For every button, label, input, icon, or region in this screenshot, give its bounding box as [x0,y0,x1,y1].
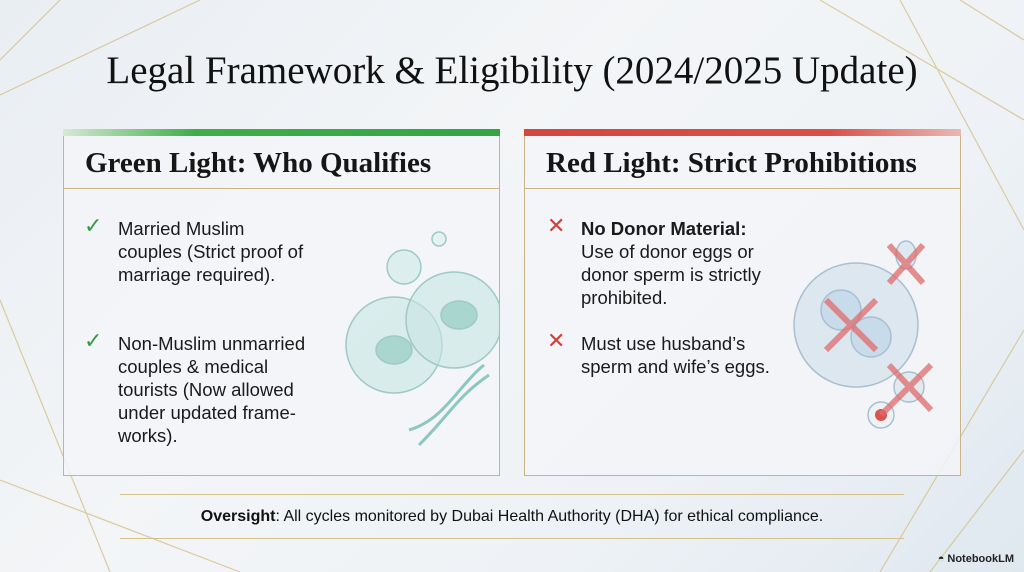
illustration: cells and DNA [345,231,499,446]
item 1: ✕ [547,213,565,238]
item 2: ✓ [84,328,102,353]
panel: green light [63,134,500,476]
oversight footer: Oversight: All cycles monitored by Dubai Health Authority (DHA) for ethical compliance. [201,508,823,525]
item 2 [547,328,770,377]
item 1: No Donor Material: [581,218,746,239]
logo: NotebookLM: ◓ NotebookLM [938,553,1014,565]
item 2: ✕ [547,328,565,353]
item 1: donor sperm is strictly [581,264,761,285]
item 2: works). [118,425,178,446]
item 2: tourists (Now allowed [118,379,294,400]
item 2 [84,328,305,446]
item 1: Married Muslim [118,218,244,239]
item 2: under updated frame- [118,402,296,423]
heading: red light: Red Light: Strict Prohibitions [546,147,917,179]
item 1: marriage required). [118,264,275,285]
item 1: prohibited. [581,287,667,308]
item 1: ✓ [84,213,102,238]
item 2: Non-Muslim unmarried [118,333,305,354]
oversight footer [120,494,904,539]
heading: green light [64,135,499,189]
item 1: couples (Strict proof of [118,241,303,262]
item 1: Use of donor eggs or [581,241,754,262]
heading: red light [525,135,960,189]
illustration: crossed embryo [793,240,933,429]
panel: red light [524,134,961,476]
item 2: sperm and wife’s eggs. [581,356,770,377]
heading: green light: Green Light: Who Qualifies [85,147,431,179]
item 1 [547,213,761,308]
item 2: Must use husband’s [581,333,745,354]
item 2: couples & medical [118,356,268,377]
item 1 [84,213,304,285]
title: Legal Framework & Eligibility (2024/2025 Update) [106,49,918,92]
